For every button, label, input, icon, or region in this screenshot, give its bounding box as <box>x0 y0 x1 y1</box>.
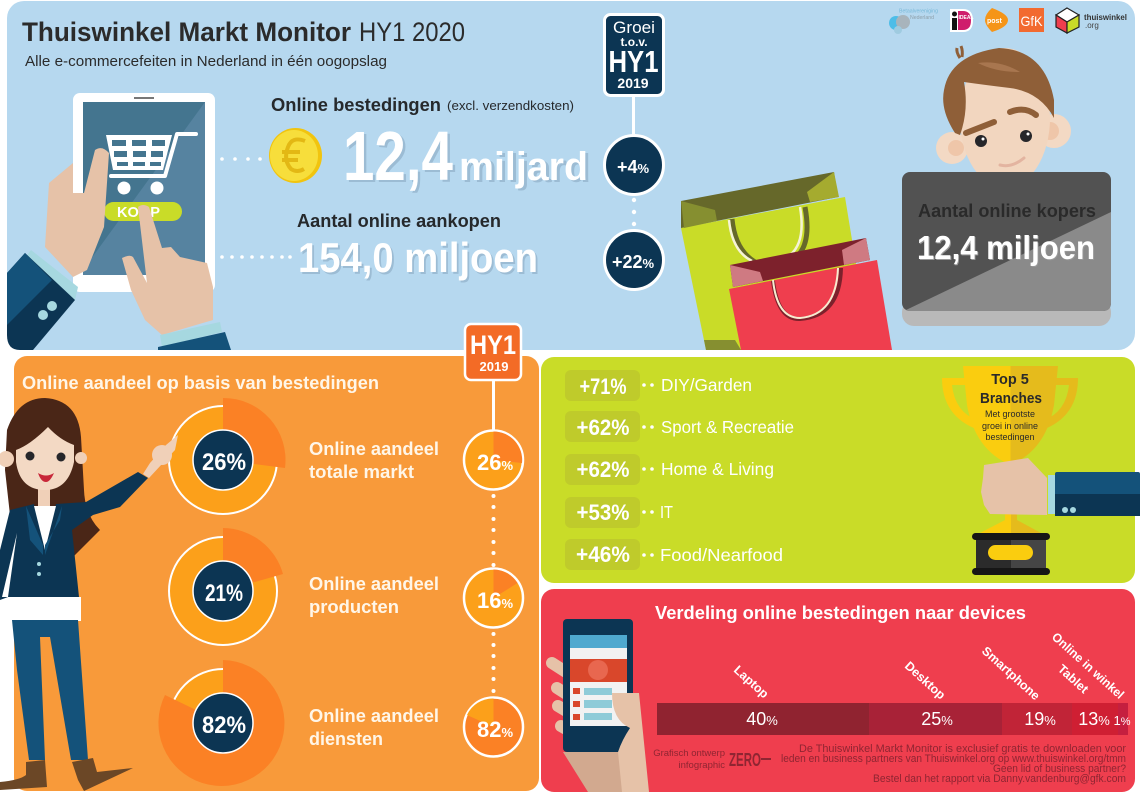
badge: growth vs HY1 2019 <box>604 14 664 96</box>
badge: HY1 2019 <box>465 324 521 380</box>
dotted connector spend <box>220 157 262 161</box>
stacked bar: devices: 19% <box>1024 709 1056 729</box>
icon: green shopping bag <box>681 172 870 350</box>
logo: PostNL: post <box>987 18 1002 25</box>
logo: betaalvereniging: Nederland <box>910 15 934 21</box>
donut: total market 26%: 26% <box>202 449 246 476</box>
value: 12,4 miljard: miljard <box>459 145 588 189</box>
icon: tablet with cart <box>73 93 215 292</box>
icon: red shopping bag <box>729 238 892 350</box>
badge: growth vs HY1 2019: Groei <box>613 18 655 37</box>
badge: HY1 2019: 2019 <box>480 359 508 374</box>
device labels: Online in winkel <box>1049 630 1127 702</box>
mini pie: 26%: 26% <box>477 450 513 475</box>
dotted connector purchases <box>220 255 292 259</box>
stacked bar: devices: 13% <box>1078 709 1110 729</box>
subtitle: Alle e-commercefeiten in Nederland in één oogopslag <box>25 53 387 70</box>
stacked bar: devices: 25% <box>921 709 953 729</box>
title: Thuiswinkel Markt Monitor <box>22 17 351 47</box>
device labels: Smartphone <box>979 644 1043 703</box>
row: Sport & Recreatie: +62% <box>576 415 630 440</box>
row: DIY/Garden <box>565 370 752 401</box>
logo: iDEAL <box>950 9 974 32</box>
value: 12,4 miljard: 12,4 <box>343 117 453 195</box>
row: DIY/Garden: DIY/Garden <box>661 375 752 395</box>
note: excl shipping: (excl. verzendkosten) <box>447 99 574 113</box>
label: products: Online aandeel <box>309 573 439 594</box>
icon: coin <box>269 128 322 183</box>
donut: products 21%: 21% <box>205 580 243 607</box>
laptop: online buyers <box>902 172 1111 326</box>
growth value +4% <box>604 136 664 194</box>
panel: top 5 sectors <box>541 357 1140 583</box>
device labels: Tablet <box>1055 662 1092 697</box>
trophy note: Met grootste <box>985 409 1035 419</box>
value: 12,4 miljoen: 12,4 miljoen <box>917 229 1095 266</box>
badge: growth vs HY1 2019: HY1 <box>608 44 658 79</box>
icon: left hand <box>7 148 109 350</box>
heading: online share: Online aandeel op basis van bestedingen <box>22 372 379 393</box>
logo: iDEAL: IDEAL <box>958 15 974 21</box>
label: total market: Online aandeel <box>309 438 439 459</box>
heading: devices: Verdeling online bestedingen naar devices <box>655 602 1026 623</box>
panel: online share <box>0 324 539 791</box>
trophy note: groei in online <box>982 421 1038 431</box>
row: Sport & Recreatie <box>565 411 794 442</box>
comparison connector <box>492 378 496 693</box>
badge: growth vs HY1 2019: 2019 <box>617 75 649 91</box>
logo: thuiswinkel: .org <box>1085 21 1099 30</box>
logo: ZERO: ZERO <box>729 750 761 770</box>
row: IT <box>565 497 673 528</box>
design credit: Grafisch ontwerp <box>653 748 725 759</box>
row: IT: IT <box>660 502 673 522</box>
trophy heading: Top 5 <box>991 372 1029 388</box>
badge: growth vs HY1 2019: t.o.v. <box>620 35 648 49</box>
device labels: Laptop <box>731 663 772 701</box>
heading: online purchases: Aantal online aankopen <box>297 210 501 231</box>
row: Food/Nearfood: +46% <box>576 542 630 567</box>
partner logos <box>889 8 1127 34</box>
title period: HY1 2020 <box>359 17 465 47</box>
label: services: Online aandeel <box>309 705 439 726</box>
growth value +22% <box>604 230 664 290</box>
device labels <box>731 630 1127 703</box>
stacked bar: devices: 40% <box>746 709 778 729</box>
badge: HY1 2019: HY1 <box>470 330 516 360</box>
donut: products 21% <box>169 528 283 645</box>
footer note: Bestel dan het rapport via Danny.vandenburg@gfk.com <box>873 773 1126 785</box>
design credit: infographic <box>679 760 725 771</box>
growth value +22%: +22% <box>612 252 654 272</box>
footer note: Geen lid of business partner? <box>993 763 1126 775</box>
stacked bar: devices <box>657 703 1131 735</box>
mini pie: 82%: 82% <box>477 717 513 742</box>
donut: services 82%: 82% <box>202 712 246 739</box>
icon: trophy held by hand <box>942 366 1140 575</box>
panel: top summary <box>7 1 1135 350</box>
heading: online spend: Online bestedingen <box>271 94 441 115</box>
footer note: De Thuiswinkel Markt Monitor is exclusief gratis te downloaden voor <box>799 743 1126 755</box>
growth connector <box>632 95 636 226</box>
logo: thuiswinkel <box>1056 8 1127 33</box>
donut: services 82% <box>158 660 284 786</box>
trophy note: bestedingen <box>985 432 1035 442</box>
label: products: producten <box>309 596 399 617</box>
row: Food/Nearfood <box>565 539 783 570</box>
illustration: woman pointing <box>0 398 178 791</box>
value: 12,4 miljard <box>343 117 588 195</box>
row: Home & Living: +62% <box>576 457 630 482</box>
panel: device split <box>541 589 1135 792</box>
mini pie: 82% <box>464 698 523 756</box>
logo: PostNL <box>985 8 1008 32</box>
icon: hand holding phone <box>552 619 649 792</box>
row: Home & Living <box>565 454 774 485</box>
row: IT: +53% <box>576 500 630 525</box>
heading: online buyers: Aantal online kopers <box>918 200 1096 221</box>
label: total market: totale markt <box>309 461 414 482</box>
label: services: diensten <box>309 728 383 749</box>
row: Home & Living: Home & Living <box>661 459 774 479</box>
stacked bar: devices: 1% <box>1113 713 1131 728</box>
logo: GfK <box>1019 8 1044 32</box>
icon: right hand pointing <box>122 205 231 350</box>
logo: betaalvereniging <box>889 8 938 34</box>
mini pie: 16%: 16% <box>477 588 513 613</box>
row: Sport & Recreatie: Sport & Recreatie <box>661 417 794 437</box>
logo: GfK: GfK <box>1020 13 1043 29</box>
device labels: Desktop <box>902 659 948 702</box>
row: Food/Nearfood: Food/Nearfood <box>660 545 783 565</box>
logo: betaalvereniging: Betaalvereniging <box>899 8 938 14</box>
icon: tablet with cart: KOOP <box>117 204 160 221</box>
trophy subheading: Branches <box>980 391 1042 407</box>
mini pie: 26% <box>464 430 523 490</box>
illustration: boy <box>936 46 1071 188</box>
row: DIY/Garden: +71% <box>580 374 626 399</box>
value: 154,0 miljoen: 154,0 miljoen <box>298 234 538 281</box>
donut: total market 26% <box>169 398 286 514</box>
mini pie: 16% <box>464 568 523 628</box>
growth value +4%: +4% <box>617 157 649 177</box>
logo: thuiswinkel: thuiswinkel <box>1084 12 1127 22</box>
